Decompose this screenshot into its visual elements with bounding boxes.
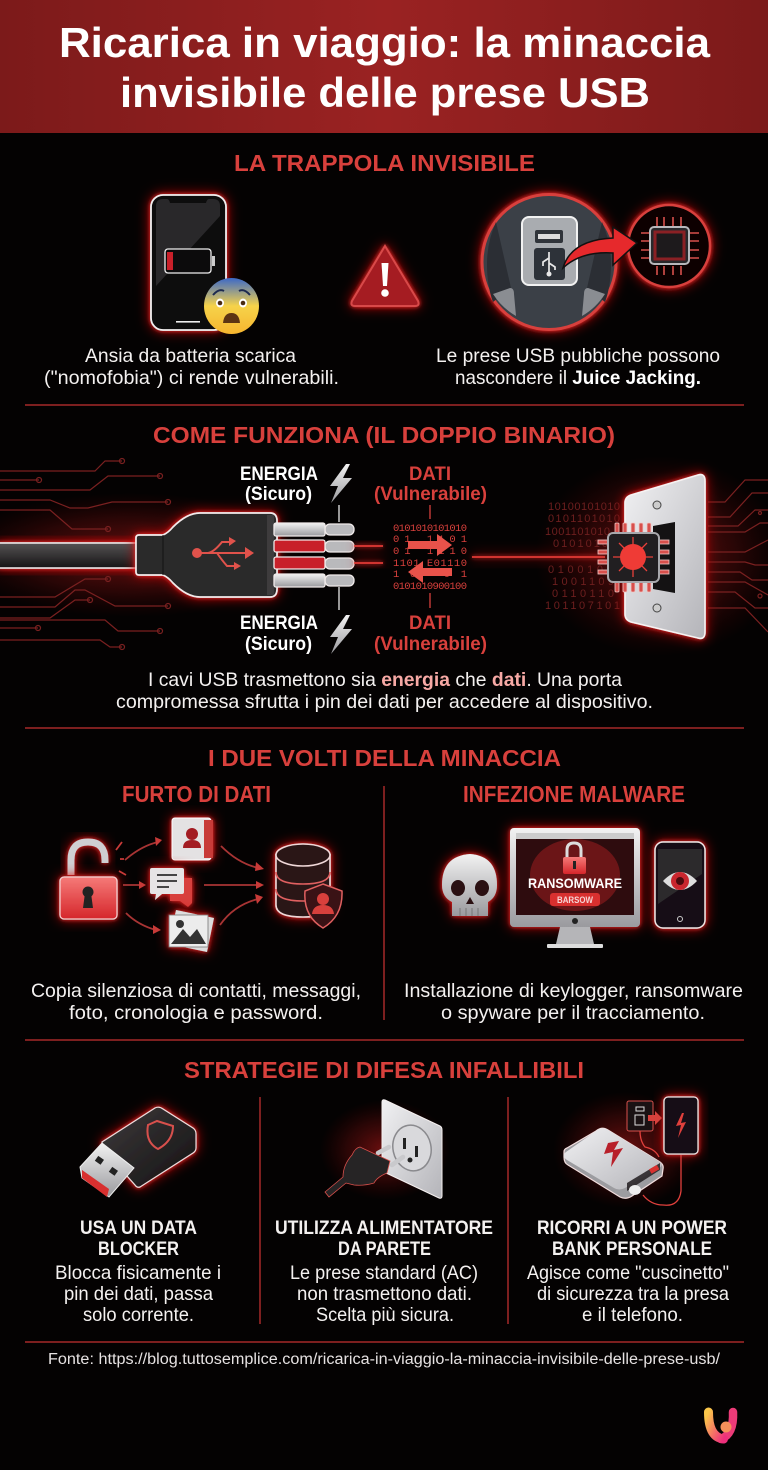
binary fading near outlet xyxy=(545,501,620,612)
text: malware infection: o spyware per il tracciamento. xyxy=(441,1002,705,1024)
binary fading near outlet: 0101010 xyxy=(553,538,608,550)
panel: i due volti xyxy=(31,745,743,1024)
logo xyxy=(708,1412,733,1439)
heading: come funziona: COME FUNZIONA (IL DOPPIO BINARIO) xyxy=(153,422,615,448)
icon: database with hacker shield xyxy=(276,844,342,928)
binary fading near outlet: 0110110 xyxy=(552,588,614,600)
binary fading near outlet: 10100101010 xyxy=(548,501,620,513)
binary data stream: 01 1101 xyxy=(393,534,467,546)
label: dati top: (Vulnerabile) xyxy=(374,484,487,505)
icon: open padlock xyxy=(60,842,117,919)
text: power bank: Agisce come "cuscinetto" xyxy=(527,1262,729,1284)
text: power bank: RICORRI A UN POWER xyxy=(537,1217,727,1239)
icon: ransomware monitor: BARSOW xyxy=(557,895,593,905)
icon: usb plug xyxy=(0,513,277,597)
icon: photos xyxy=(169,910,214,952)
text: data blocker: solo corrente. xyxy=(83,1304,194,1326)
title banner: invisibile delle prese USB xyxy=(120,69,650,116)
icon: contact book xyxy=(172,818,213,860)
heading: i due volti: I DUE VOLTI DELLA MINACCIA xyxy=(208,745,561,771)
icon: wall outlet and plug xyxy=(320,1100,450,1200)
subheading: furto di dati: FURTO DI DATI xyxy=(122,781,271,807)
binary fading near outlet: 1001101010 xyxy=(545,526,610,538)
icon: warning triangle xyxy=(351,246,419,306)
binary fading near outlet: 101107101 xyxy=(545,600,620,612)
text: juice jacking: nascondere il Juice Jacking. xyxy=(455,367,701,389)
text: data theft: Copia silenziosa di contatti, messaggi, xyxy=(31,980,361,1002)
label: dati top: DATI xyxy=(409,464,451,485)
text: data blocker: pin dei dati, passa xyxy=(64,1283,213,1305)
heading: strategie di difesa: STRATEGIE DI DIFESA INFALLIBILI xyxy=(184,1057,584,1083)
text: wall charger: UTILIZZA ALIMENTATORE xyxy=(275,1217,493,1239)
text: malware infection: Installazione di keylogger, ransomware xyxy=(404,980,743,1002)
text: power bank: BANK PERSONALE xyxy=(552,1238,712,1260)
icon: chat bubbles xyxy=(150,868,192,907)
text: juice jacking: Le prese USB pubbliche possono xyxy=(436,345,720,367)
icon: scared face emoji xyxy=(204,278,259,334)
text: wall charger: non trasmettono dati. xyxy=(297,1283,472,1305)
icon: power bank and phone xyxy=(553,1092,698,1208)
circuit traces left xyxy=(0,458,310,650)
arrow: port to chip xyxy=(563,227,637,268)
label: dati bottom: DATI xyxy=(409,613,451,634)
icon: usb data blocker xyxy=(80,1107,196,1197)
panel: come funziona xyxy=(0,422,768,713)
binary data stream: 10 01 xyxy=(393,569,467,581)
label: energia top: (Sicuro) xyxy=(245,484,312,505)
text: data blocker: USA UN DATA xyxy=(80,1217,197,1239)
text: data blocker xyxy=(55,1217,221,1326)
text: juice jacking xyxy=(436,345,720,389)
source line: Fonte: https://blog.tuttosemplice.com/ricarica-in-viaggio-la-minaccia-invisibile-delle-prese-usb/ xyxy=(48,1351,721,1368)
binary fading near outlet: 1001109 xyxy=(552,576,614,588)
icon: public usb port in seat xyxy=(482,194,616,330)
binary fading near outlet: 0101101010 xyxy=(548,513,620,525)
arrow: data in xyxy=(408,534,452,556)
icon: lightning bottom xyxy=(330,615,352,654)
icon: ransomware monitor xyxy=(510,828,640,948)
arrow: data out xyxy=(408,561,452,583)
icon: lightning top xyxy=(330,464,352,503)
binary data stream: 0101010101010 xyxy=(393,523,467,535)
text: data theft xyxy=(31,980,361,1024)
label: dati bottom: (Vulnerabile) xyxy=(374,634,487,655)
label: energia top: ENERGIA xyxy=(240,464,318,485)
text: power bank: e il telefono. xyxy=(582,1304,683,1326)
label: energia bottom: ENERGIA xyxy=(240,613,318,634)
label: dati top xyxy=(374,464,487,505)
title banner xyxy=(0,0,768,133)
subheading: infezione malware: INFEZIONE MALWARE xyxy=(463,781,685,807)
text: wall charger: Scelta più sicura. xyxy=(316,1304,454,1326)
icon: phone with low battery xyxy=(151,195,226,330)
binary data stream: 1101 E01110 xyxy=(393,558,467,570)
icon: phone with spy eye xyxy=(655,842,705,928)
text: power bank xyxy=(527,1217,729,1326)
panel: la trappola invisibile xyxy=(44,150,720,389)
icon: ransomware monitor: RANSOMWARE xyxy=(528,875,622,891)
text: wall charger xyxy=(275,1217,493,1326)
binary data stream: 0101010900100 xyxy=(393,581,467,593)
binary data stream: 01 1110 xyxy=(393,546,467,558)
label: energia top xyxy=(240,464,318,505)
title banner: Ricarica in viaggio: la minaccia xyxy=(59,19,711,66)
text: usb explanation xyxy=(116,669,653,713)
text: battery anxiety xyxy=(44,345,339,389)
icon: compromised chip xyxy=(628,205,710,287)
text: usb explanation: I cavi USB trasmettono sia energia che dati. Una porta xyxy=(148,669,622,691)
label: energia bottom: (Sicuro) xyxy=(245,634,312,655)
panel: strategie di difesa xyxy=(55,1057,729,1326)
text: usb explanation: compromessa sfrutta i pin dei dati per accedere al dispositivo. xyxy=(116,691,653,713)
circuit traces right xyxy=(535,456,768,656)
text: battery anxiety: ("nomofobia") ci rende vulnerabili. xyxy=(44,367,339,389)
arrows: data flow xyxy=(116,837,264,934)
label: energia bottom xyxy=(240,613,318,655)
text: wall charger: Le prese standard (AC) xyxy=(290,1262,478,1284)
heading: la trappola invisibile: LA TRAPPOLA INVISIBILE xyxy=(234,150,535,176)
icon: skull xyxy=(442,854,497,916)
binary fading near outlet: 010010 xyxy=(548,564,603,576)
icon: wall outlet with chip xyxy=(598,475,705,638)
binary data stream xyxy=(393,523,467,593)
text: power bank: di sicurezza tra la presa xyxy=(537,1283,729,1305)
text: battery anxiety: Ansia da batteria scarica xyxy=(85,345,296,367)
text: malware infection xyxy=(404,980,743,1024)
text: data blocker: BLOCKER xyxy=(98,1238,179,1260)
text: data blocker: Blocca fisicamente i xyxy=(55,1262,221,1284)
label: dati bottom xyxy=(374,613,487,655)
icon: connector pins xyxy=(274,523,354,587)
text: data theft: foto, cronologia e password. xyxy=(69,1002,323,1024)
text: wall charger: DA PARETE xyxy=(338,1238,431,1260)
data signal lines xyxy=(354,546,605,563)
